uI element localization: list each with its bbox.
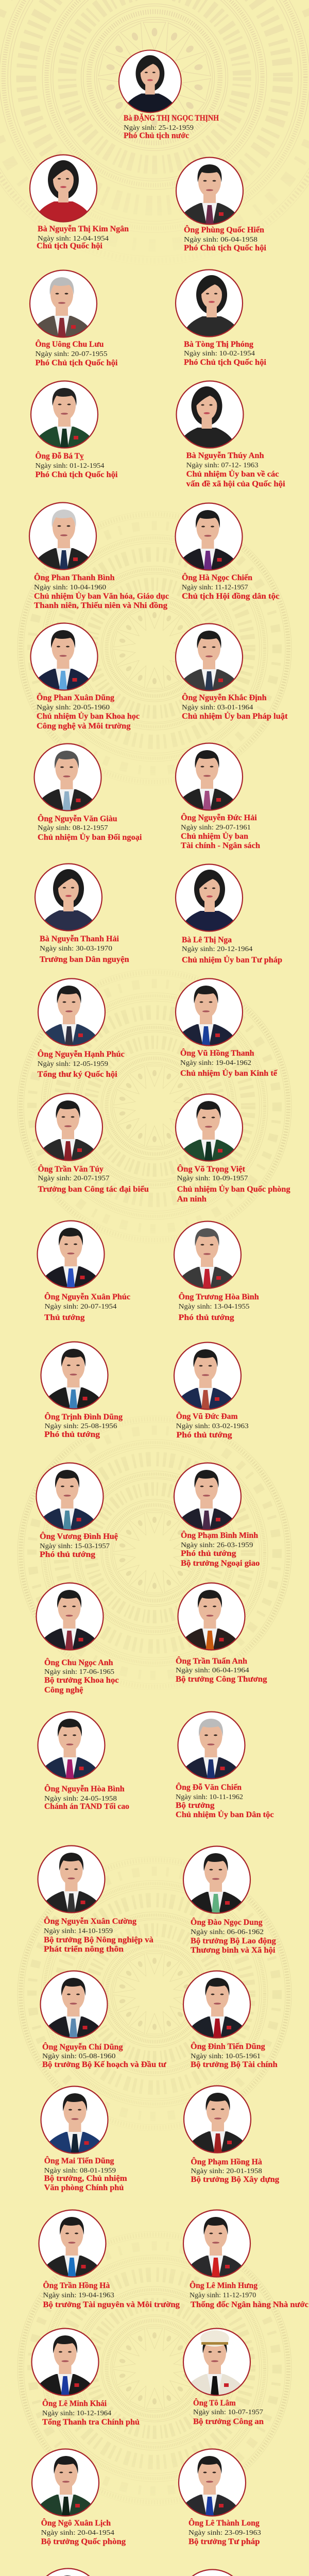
- name: Ông Đinh Tiến Dũng: [191, 2041, 265, 2051]
- name: Ông Đỗ Văn Chiến: [176, 1782, 242, 1792]
- role: Bộ trưởng Ngoại giao: [181, 1559, 260, 1568]
- role: Phó Chủ tịch Quốc hội: [35, 359, 118, 367]
- portrait: [174, 1463, 241, 1530]
- role: Chủ nhiệm Ủy ban Pháp luật: [182, 711, 288, 721]
- portrait: [37, 1221, 104, 1288]
- role: Chủ nhiệm Ủy ban: [181, 831, 248, 841]
- portrait: [31, 381, 98, 448]
- panel: Bà Nguyễn Thị Kim Ngân: [30, 155, 129, 250]
- panel: Bà Tòng Thị Phóng: [176, 270, 267, 367]
- name: Bà ĐẶNG THỊ NGỌC THỊNH: [124, 113, 219, 123]
- panel: Ông Đỗ Bá Tỵ: [31, 381, 118, 479]
- name: Ông Nguyễn Hòa Bình: [44, 1784, 125, 1793]
- panel: Ông Đinh Tiến Dũng: [183, 1971, 278, 2069]
- name: Ông Võ Trọng Việt: [177, 1164, 246, 1174]
- name: Ông Chu Ngọc Anh: [44, 1657, 113, 1667]
- name: Ông Ngô Xuân Lịch: [41, 2518, 111, 2528]
- portrait: [39, 2210, 106, 2277]
- role: Bộ trưởng Tài nguyên và Môi trường: [43, 2300, 180, 2309]
- portrait: [183, 1846, 250, 1913]
- role: Chủ nhiệm Ủy ban Quốc phòng: [177, 1184, 290, 1194]
- portrait: [36, 1093, 102, 1161]
- name: Ông Nguyễn Xuân Phúc: [44, 1292, 130, 1301]
- portrait: [29, 503, 96, 570]
- birth date: Ngày sinh: 10-05-1961: [191, 2053, 261, 2060]
- role: Công nghệ: [44, 1686, 83, 1694]
- role: [191, 1937, 276, 1955]
- portrait: [32, 2449, 99, 2516]
- panel: Ông Lê Minh Khái: [32, 2329, 140, 2427]
- portrait: [34, 744, 101, 811]
- panel: Ông Phan Thanh Bình: [29, 503, 169, 610]
- role: Bộ trưởng Bộ Tài chính: [191, 2060, 278, 2069]
- portrait: [35, 863, 102, 931]
- portrait: [31, 623, 98, 690]
- role: Tổng Thanh tra Chính phủ: [42, 2418, 140, 2427]
- name: Bà Nguyễn Thanh Hải: [40, 935, 119, 943]
- role: Tài chính - Ngân sách: [181, 841, 260, 850]
- portrait: [184, 2086, 251, 2153]
- portrait: [37, 979, 105, 1046]
- birth date: Ngày sinh: 12-05-1959: [38, 1060, 108, 1068]
- portrait: [174, 1221, 241, 1289]
- role: Chủ nhiệm Ủy ban Văn hóa, Giáo dục: [34, 591, 169, 601]
- name: Ông Đào Ngọc Dung: [191, 1917, 263, 1927]
- portrait: [38, 1845, 105, 1913]
- panel: Ông Nguyễn Hòa Bình: [38, 1711, 129, 1811]
- portrait: [176, 270, 243, 337]
- birth date: Ngày sinh: 10-12-1964: [42, 2410, 111, 2417]
- name: Ông Phùng Quốc Hiển: [184, 225, 264, 234]
- role: Phó thủ tướng: [181, 1549, 236, 1558]
- birth date: Ngày sinh: 01-12-1954: [35, 462, 104, 470]
- role: Tổng thư ký Quốc hội: [38, 1070, 117, 1079]
- birth date: Ngày sinh: 06-04-1964: [176, 1667, 249, 1674]
- birth date: Ngày sinh: 06-04-1958: [184, 236, 258, 244]
- role: Chủ nhiệm Ủy ban về các: [186, 469, 279, 479]
- name: Ông Nguyễn Văn Giàu: [38, 814, 117, 823]
- panel: Ông Lê Minh Hưng: [183, 2210, 308, 2309]
- role: Bộ trưởng, Chủ nhiệm: [44, 2174, 127, 2183]
- panel: Ông Vương Đình Huệ: [35, 1463, 118, 1559]
- birth date: Ngày sinh: 20-07-1955: [35, 350, 107, 358]
- role: Chủ nhiệm Ủy ban Khoa học: [37, 711, 140, 721]
- panel: Ông Phan Xuân Dũng: [31, 623, 140, 731]
- name: Bà Tòng Thị Phóng: [184, 340, 253, 349]
- role: Chủ nhiệm Ủy ban Tư pháp: [182, 955, 282, 964]
- portrait: [178, 1711, 245, 1779]
- role: Thanh niên, Thiếu niên và Nhi đồng: [34, 601, 167, 610]
- role: [177, 1184, 290, 1204]
- panel: Ông Phùng Xuân Nhạ: [35, 2569, 168, 2576]
- role: Bộ trưởng Bộ Nông nghiệp và: [44, 1936, 153, 1944]
- panel: Bà Đặng Thị Ngọc Thịnh: [119, 50, 219, 140]
- role: Chủ tịch Quốc hội: [37, 242, 103, 250]
- name: Ông Uông Chu Lưu: [35, 339, 104, 349]
- role: [44, 2174, 127, 2192]
- role: Thống đốc Ngân hàng Nhà nước: [191, 2300, 308, 2309]
- portrait: [176, 1094, 243, 1161]
- birth date: Ngày sinh: 03-02-1963: [176, 1422, 249, 1430]
- role: Phó thủ tướng: [44, 1430, 100, 1439]
- portrait: [35, 2569, 101, 2576]
- role: Công nghệ và Môi trường: [37, 722, 131, 731]
- role: Phát triển nông thôn: [44, 1945, 124, 1954]
- name: Ông Trần Văn Túy: [38, 1164, 104, 1174]
- portrait: [183, 2210, 250, 2277]
- panel: Ông Vũ Hồng Thanh: [174, 979, 278, 1078]
- panel: Ông Uông Chu Lưu: [30, 270, 118, 367]
- birth date: Ngày sinh: 20-07-1954: [44, 1303, 116, 1311]
- name: Ông Phạm Hồng Hà: [191, 2157, 262, 2166]
- panel: Ông Lê Thành Long: [178, 2449, 261, 2546]
- birth date: Ngày sinh: 15-03-1957: [40, 1543, 110, 1550]
- role: Chủ nhiệm Ủy ban Đối ngoại: [38, 832, 142, 842]
- panel: Ông Hồ Đức Phớc: [179, 2570, 285, 2576]
- panel: Ông Phạm Hồng Hà: [184, 2086, 279, 2184]
- birth date: Ngày sinh: 19-04-1963: [43, 2292, 114, 2299]
- name: Ông Vũ Hồng Thanh: [180, 1048, 254, 1058]
- portrait: [30, 155, 97, 222]
- birth date: Ngày sinh: 07-12- 1963: [186, 462, 259, 469]
- portrait: [176, 623, 243, 691]
- role: Phó Chủ tịch Quốc hội: [184, 358, 267, 367]
- birth date: Ngày sinh: 19-04-1962: [180, 1059, 251, 1067]
- role: [176, 1801, 274, 1819]
- portrait: [174, 979, 243, 1046]
- portrait: [36, 1583, 103, 1650]
- role: Phó thủ tướng: [40, 1550, 95, 1559]
- panel: Ông Phùng Quốc Hiển: [176, 158, 267, 252]
- birth date: Ngày sinh: 30-03-1970: [40, 945, 112, 953]
- role: Chủ tịch Hội đồng dân tộc: [182, 592, 279, 601]
- name: Bà Nguyễn Thị Kim Ngân: [38, 225, 129, 233]
- portrait: [178, 1583, 245, 1650]
- role: [181, 1549, 260, 1568]
- portrait: [183, 1971, 250, 2038]
- name: Ông Phan Xuân Dũng: [37, 692, 114, 702]
- panel: Ông Võ Trọng Việt: [176, 1094, 290, 1204]
- role: [34, 591, 169, 610]
- birth date: Ngày sinh: 29-07-1961: [181, 824, 251, 832]
- panel: Ông Tô Lâm: [183, 2329, 264, 2426]
- name: Ông Lê Minh Hưng: [190, 2280, 258, 2290]
- role: Phó thủ tướng: [179, 1313, 234, 1322]
- role: Bộ trưởng Quốc phòng: [41, 2537, 126, 2546]
- birth date: Ngày sinh: 25-08-1956: [44, 1422, 117, 1430]
- birth date: Ngày sinh: 10-11-1962: [176, 1793, 243, 1801]
- panel: Ông Nguyễn Khắc Định: [176, 623, 288, 721]
- role: Chánh án TAND Tối cao: [44, 1802, 129, 1811]
- panel: Ông Vũ Đức Đam: [174, 1343, 249, 1439]
- portrait: [179, 2570, 246, 2576]
- birth date: Ngày sinh: 24-05-1958: [44, 1795, 117, 1803]
- birth date: Ngày sinh: 20-05-1960: [37, 704, 110, 711]
- panel: Ông Mai Tiến Dũng: [41, 2087, 127, 2192]
- birth date: Ngày sinh: 12-04-1954: [38, 235, 109, 243]
- role: Chủ nhiệm Ủy ban Kinh tế: [180, 1068, 278, 1078]
- birth date: Ngày sinh: 13-04-1955: [179, 1303, 249, 1311]
- birth date: Ngày sinh: 05-08-1960: [42, 2053, 115, 2060]
- birth date: Ngày sinh: 11-12-1970: [190, 2292, 256, 2299]
- role: vấn đề xã hội của Quốc hội: [186, 480, 285, 488]
- name: Ông Trịnh Đình Dũng: [44, 1412, 123, 1421]
- role: [37, 711, 140, 731]
- birth date: Ngày sinh: 08-01-1959: [44, 2167, 116, 2175]
- role: [44, 1676, 119, 1694]
- birth date: Ngày sinh: 10-02-1954: [184, 350, 255, 358]
- birth date: Ngày sinh: 17-06-1965: [44, 1668, 114, 1676]
- role: Thương binh và Xã hội: [191, 1946, 276, 1955]
- portrait: [30, 270, 97, 337]
- role: Bộ trưởng Bộ Lao động: [191, 1937, 276, 1945]
- birth date: Ngày sinh: 11-12-1957: [182, 584, 248, 591]
- role: Phó thủ tướng: [176, 1431, 232, 1439]
- portrait: [178, 2449, 246, 2516]
- name: Ông Mai Tiến Dũng: [44, 2156, 114, 2165]
- role: Trưởng ban Công tác đại biểu: [38, 1185, 149, 1194]
- role: Phó Chủ tịch Quốc hội: [35, 470, 118, 479]
- name: Ông Lê Thành Long: [188, 2518, 260, 2528]
- panel: Bà Lê Thị Nga: [176, 865, 282, 964]
- role: Bộ trưởng Tư pháp: [188, 2537, 260, 2546]
- panel: Ông Đào Ngọc Dung: [183, 1846, 276, 1955]
- name: Ông Vũ Đức Đam: [176, 1411, 238, 1421]
- panel: Bà Nguyễn Thanh Hải: [35, 863, 129, 964]
- portrait: [176, 158, 243, 225]
- name: Ông Vương Đình Huệ: [40, 1531, 118, 1541]
- birth date: Ngày sinh: 23-09-1963: [188, 2529, 261, 2537]
- portrait: [41, 2087, 108, 2154]
- name: Bà Lê Thị Nga: [182, 936, 232, 944]
- panel: Ông Hà Ngọc Chiến: [175, 503, 279, 601]
- name: Ông Nguyễn Khắc Định: [182, 692, 267, 702]
- birth date: Ngày sinh: 20-04-1954: [41, 2529, 114, 2537]
- panel: Ông Phạm Bình Minh: [174, 1463, 260, 1568]
- panel: Ông Nguyễn Chí Dũng: [40, 1971, 166, 2069]
- portrait: [40, 1971, 107, 2038]
- portrait: [175, 503, 242, 570]
- birth date: Ngày sinh: 06-06-1962: [191, 1928, 264, 1936]
- panel: Ông Trần Tuấn Anh: [176, 1583, 267, 1684]
- panel: Bà Nguyễn Thúy Anh: [176, 381, 285, 488]
- name: Ông Nguyễn Đức Hải: [181, 812, 257, 822]
- role: Văn phòng Chính phủ: [44, 2183, 124, 2192]
- name: Ông Phạm Bình Minh: [181, 1530, 258, 1540]
- portrait: [119, 50, 181, 113]
- role: Trưởng ban Dân nguyện: [40, 955, 129, 964]
- portrait: [175, 743, 243, 810]
- portrait: [35, 1463, 103, 1530]
- panel: Ông Trịnh Đình Dũng: [41, 1342, 123, 1439]
- birth date: Ngày sinh: 08-12-1957: [38, 824, 108, 832]
- panel: Ông Trần Hồng Hà: [39, 2210, 180, 2309]
- panel: Ông Trần Văn Túy: [36, 1093, 149, 1194]
- panel: Ông Nguyễn Hạnh Phúc: [37, 979, 125, 1079]
- portrait: [176, 865, 243, 931]
- portrait: [183, 2329, 250, 2396]
- birth date: Ngày sinh: 20-01-1958: [191, 2167, 262, 2175]
- name: Ông Trần Tuấn Anh: [176, 1656, 247, 1666]
- name: Ông Tô Lâm: [193, 2398, 236, 2408]
- name: Bà Nguyễn Thúy Anh: [186, 451, 264, 460]
- birth date: Ngày sinh: 10-07-1957: [193, 2409, 263, 2416]
- birth date: Ngày sinh: 25-12-1959: [124, 124, 194, 132]
- role: Phó Chủ tịch Quốc hội: [184, 244, 267, 252]
- portrait: [32, 2329, 99, 2396]
- birth date: Ngày sinh: 20-07-1957: [38, 1175, 109, 1182]
- role: [186, 469, 285, 488]
- name: Ông Hà Ngọc Chiến: [182, 572, 252, 582]
- role: [181, 831, 260, 850]
- role: Bộ trưởng Công Thương: [176, 1675, 267, 1684]
- role: Thủ tướng: [44, 1313, 84, 1322]
- birth date: Ngày sinh: 03-01-1964: [182, 704, 253, 711]
- birth date: Ngày sinh: 20-12-1964: [182, 945, 252, 953]
- panel: Ông Đỗ Văn Chiến: [176, 1711, 274, 1819]
- portrait: [38, 1711, 105, 1779]
- role: Bộ trưởng Bộ Xây dựng: [191, 2175, 279, 2184]
- name: Ông Trần Hồng Hà: [43, 2280, 110, 2290]
- portrait: [174, 1343, 241, 1410]
- panel: Ông Nguyễn Văn Giàu: [34, 744, 142, 842]
- panel: Ông Chu Ngọc Anh: [36, 1583, 119, 1694]
- role: Bộ trưởng Công an: [193, 2417, 264, 2426]
- portrait: [176, 381, 243, 448]
- name: Ông Lê Minh Khái: [42, 2398, 107, 2408]
- panel: Ông Nguyễn Xuân Cường: [38, 1845, 153, 1954]
- portrait: [41, 1342, 108, 1409]
- birth date: Ngày sinh: 26-03-1959: [181, 1541, 253, 1549]
- panel: Ông Ngô Xuân Lịch: [32, 2449, 126, 2546]
- name: Ông Nguyễn Xuân Cường: [44, 1916, 136, 1926]
- role: Chủ nhiệm Ủy ban Dân tộc: [176, 1809, 274, 1819]
- role: Bộ trưởng Bộ Kế hoạch và Đầu tư: [42, 2060, 166, 2069]
- panel: Ông Nguyễn Đức Hải: [175, 743, 260, 850]
- name: Ông Phan Thanh Bình: [34, 572, 115, 582]
- panel: Ông Trương Hòa Bình: [174, 1221, 259, 1322]
- role: An ninh: [177, 1195, 207, 1204]
- name: Ông Đỗ Bá Tỵ: [35, 451, 83, 461]
- role: [44, 1936, 153, 1954]
- role: Phó Chủ tịch nước: [124, 131, 189, 140]
- birth date: Ngày sinh: 10-09-1957: [177, 1175, 248, 1182]
- role: Bộ trưởng: [176, 1801, 214, 1810]
- name: Ông Trương Hòa Bình: [179, 1292, 259, 1301]
- role: Bộ trưởng Khoa học: [44, 1676, 119, 1685]
- birth date: Ngày sinh: 14-10-1959: [44, 1927, 113, 1935]
- panel: Ông Nguyễn Xuân Phúc: [37, 1221, 130, 1322]
- name: Ông Nguyễn Hạnh Phúc: [38, 1049, 125, 1059]
- birth date: Ngày sinh: 10-04-1960: [34, 584, 106, 591]
- name: Ông Nguyễn Chí Dũng: [42, 2042, 123, 2052]
